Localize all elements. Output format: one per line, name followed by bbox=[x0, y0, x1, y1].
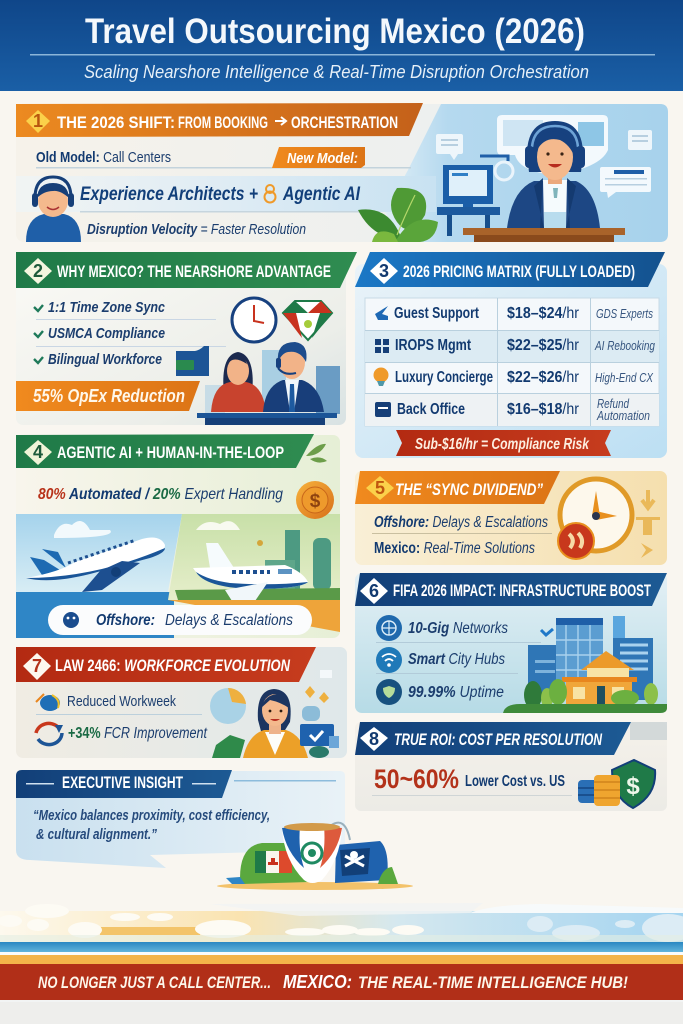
row: luxury concierge: Luxury Concierge bbox=[395, 369, 493, 386]
icon: orange clock bbox=[560, 479, 632, 551]
panel 5 heading: THE “SYNC DIVIDEND” bbox=[395, 480, 543, 499]
illustration: agent at desk bbox=[436, 115, 652, 242]
panel 1 heading: 1 bbox=[33, 111, 43, 131]
list: uptime bbox=[376, 679, 504, 705]
panel 2: why Mexico bbox=[16, 252, 357, 425]
FCR improvement text: +34% FCR Improvement bbox=[68, 725, 208, 742]
panel 4 heading: 4 bbox=[33, 442, 43, 462]
footer text: MEXICO: bbox=[283, 972, 352, 992]
icon: gem bbox=[283, 301, 332, 340]
automated split text: 80% Automated / 20% Expert Handling bbox=[38, 486, 283, 503]
pill: offshore delays: Offshore: bbox=[96, 612, 155, 629]
checklist: Bilingual Workforce bbox=[48, 351, 162, 368]
panel 8 heading: 8 bbox=[369, 729, 379, 749]
pricing table bbox=[365, 298, 659, 426]
offshore text: Offshore: Delays & Escalations bbox=[374, 514, 548, 531]
experience architects line: Experience Architects + bbox=[80, 184, 258, 205]
icon: red seal bbox=[558, 523, 594, 559]
quote: & cultural alignment.” bbox=[36, 826, 157, 843]
footer text: THE REAL-TIME INTELLIGENCE HUB! bbox=[358, 973, 628, 992]
checklist bbox=[34, 299, 226, 368]
list: 10-gig networks: 10-Gig Networks bbox=[408, 620, 508, 637]
scene: beach and clouds bbox=[0, 903, 683, 955]
panel 3 heading bbox=[355, 252, 665, 287]
icon: agent with headset bbox=[26, 177, 81, 242]
row: back office: Back Office bbox=[397, 401, 465, 418]
footer banner bbox=[0, 955, 683, 1024]
quote bbox=[33, 807, 270, 843]
stat tag: 55% OpEx Reduction: 55% OpEx Reduction bbox=[33, 386, 185, 406]
illustration: Mexico plane and city bbox=[168, 514, 340, 601]
panel 5 heading bbox=[355, 471, 560, 504]
mexico text: Mexico: Real-Time Solutions bbox=[374, 540, 535, 557]
row: IROPS management: IROPS Mgmt bbox=[395, 337, 472, 354]
row: luxury concierge: High-End CX bbox=[595, 371, 654, 385]
panel 4 heading bbox=[16, 434, 314, 468]
panel 2 heading bbox=[16, 252, 357, 288]
panel: executive insight bbox=[16, 770, 345, 868]
row: back office bbox=[375, 397, 650, 423]
panel 7 heading: LAW 2466: WORKFORCE EVOLUTION bbox=[55, 656, 291, 675]
panel 6: FIFA impact bbox=[355, 573, 667, 713]
quote: “Mexico balances proximity, cost efficiency, bbox=[33, 807, 270, 824]
checklist: USMCA Compliance bbox=[48, 325, 165, 342]
row: luxury concierge bbox=[374, 368, 654, 386]
panel 2 heading: WHY MEXICO? THE NEARSHORE ADVANTAGE bbox=[57, 262, 331, 281]
pill: offshore delays: Delays & Escalations bbox=[165, 612, 293, 629]
stat tag: 55% OpEx Reduction bbox=[16, 381, 200, 411]
row: IROPS management: AI Rebooking bbox=[594, 339, 655, 353]
icon: check bbox=[541, 629, 553, 635]
executive insight heading bbox=[16, 770, 232, 798]
panel 7: law 2466 bbox=[16, 647, 347, 758]
pill: offshore delays bbox=[48, 605, 312, 635]
icon: leaves bbox=[306, 444, 327, 463]
panel 6 heading bbox=[355, 573, 667, 606]
new model tag bbox=[272, 147, 365, 168]
panel 7 heading: 7 bbox=[32, 656, 42, 676]
bottom bands bbox=[168, 600, 340, 632]
panel 3 heading: 3 bbox=[379, 261, 389, 281]
stat: 50-60% lower cost: 50~60% bbox=[374, 764, 459, 794]
icon: coins and shield bbox=[578, 760, 655, 808]
disruption velocity line: Disruption Velocity = Faster Resolution bbox=[87, 221, 306, 238]
panel 3: pricing matrix bbox=[355, 252, 667, 458]
checklist: 1:1 Time Zone Sync bbox=[48, 299, 166, 316]
panel 2 heading: 2 bbox=[33, 261, 43, 281]
list: 10-gig networks bbox=[376, 615, 508, 641]
icon: cycle arrows bbox=[36, 723, 63, 745]
row: guest support: $18–$24/hr bbox=[507, 305, 580, 322]
panel 1 heading bbox=[16, 103, 423, 137]
illustration: offshore plane bbox=[16, 514, 182, 638]
icon: small flag tab bbox=[176, 346, 209, 376]
row: back office: $16–$18/hr bbox=[507, 401, 580, 418]
stat: 50-60% lower cost bbox=[374, 764, 565, 794]
old model text: Old Model: Call Centers bbox=[36, 149, 171, 166]
stat: 50-60% lower cost: Lower Cost vs. US bbox=[465, 773, 565, 790]
panel 8 heading: TRUE ROI: COST PER RESOLUTION bbox=[394, 730, 603, 749]
row: back office: Automation bbox=[596, 409, 650, 423]
icon: coins and shield: $ bbox=[626, 773, 640, 800]
panel 4: agentic AI bbox=[16, 434, 340, 638]
experience architects line: Agentic AI bbox=[282, 184, 361, 205]
panel 4 heading: AGENTIC AI + HUMAN-IN-THE-LOOP bbox=[57, 443, 284, 462]
list: smart city hubs: Smart City Hubs bbox=[408, 651, 505, 668]
illustration: city with hub bbox=[503, 616, 667, 713]
panel 1 heading: FROM BOOKING bbox=[178, 113, 268, 132]
icon: arrows bbox=[636, 490, 660, 558]
row: guest support bbox=[375, 305, 653, 322]
executive insight heading: EXECUTIVE INSIGHT bbox=[62, 773, 183, 792]
panel 7 heading bbox=[16, 647, 316, 682]
row: guest support: Guest Support bbox=[394, 305, 480, 322]
panel 8: true ROI bbox=[355, 722, 667, 811]
ribbon: compliance risk: Sub-$16/hr = Compliance Risk bbox=[415, 436, 590, 453]
ribbon: compliance risk bbox=[396, 430, 611, 456]
illustration: bilingual agents bbox=[197, 342, 340, 425]
illustration: travel bags with flag bbox=[217, 823, 413, 890]
panel 1 heading: THE 2026 SHIFT: bbox=[57, 113, 175, 132]
panel 6 heading: 6 bbox=[369, 581, 379, 601]
header banner bbox=[0, 0, 683, 91]
panel 5 heading: 5 bbox=[375, 478, 385, 498]
reduced workweek text: Reduced Workweek bbox=[67, 693, 176, 710]
title: Travel Outsourcing Mexico (2026) bbox=[85, 12, 585, 51]
row: back office: Refund bbox=[597, 397, 630, 411]
panel 1 heading: ORCHESTRATION bbox=[291, 113, 398, 132]
illustration: employee bbox=[210, 670, 339, 758]
row: IROPS management bbox=[375, 337, 655, 354]
panel 5: sync dividend bbox=[355, 471, 667, 565]
row: luxury concierge: $22–$26/hr bbox=[507, 369, 580, 386]
icon: coin: $ bbox=[310, 491, 321, 512]
panel 1: the 2026 shift bbox=[16, 103, 668, 242]
icon: coin bbox=[296, 481, 334, 519]
icon: clock bbox=[232, 298, 276, 342]
list: uptime: 99.99% Uptime bbox=[408, 684, 504, 701]
footer text: NO LONGER JUST A CALL CENTER... bbox=[38, 973, 271, 992]
panel 8 heading bbox=[355, 722, 631, 755]
row: IROPS management: $22–$25/hr bbox=[507, 337, 580, 354]
icon: workweek bbox=[36, 694, 60, 711]
new model tag: New Model: bbox=[287, 150, 358, 167]
subtitle: Scaling Nearshore Intelligence & Real-Time Disruption Orchestration bbox=[84, 61, 589, 82]
footer text bbox=[38, 972, 628, 992]
row: guest support: GDS Experts bbox=[596, 307, 653, 321]
list: smart city hubs bbox=[376, 647, 505, 673]
icon: plant bbox=[358, 188, 438, 242]
